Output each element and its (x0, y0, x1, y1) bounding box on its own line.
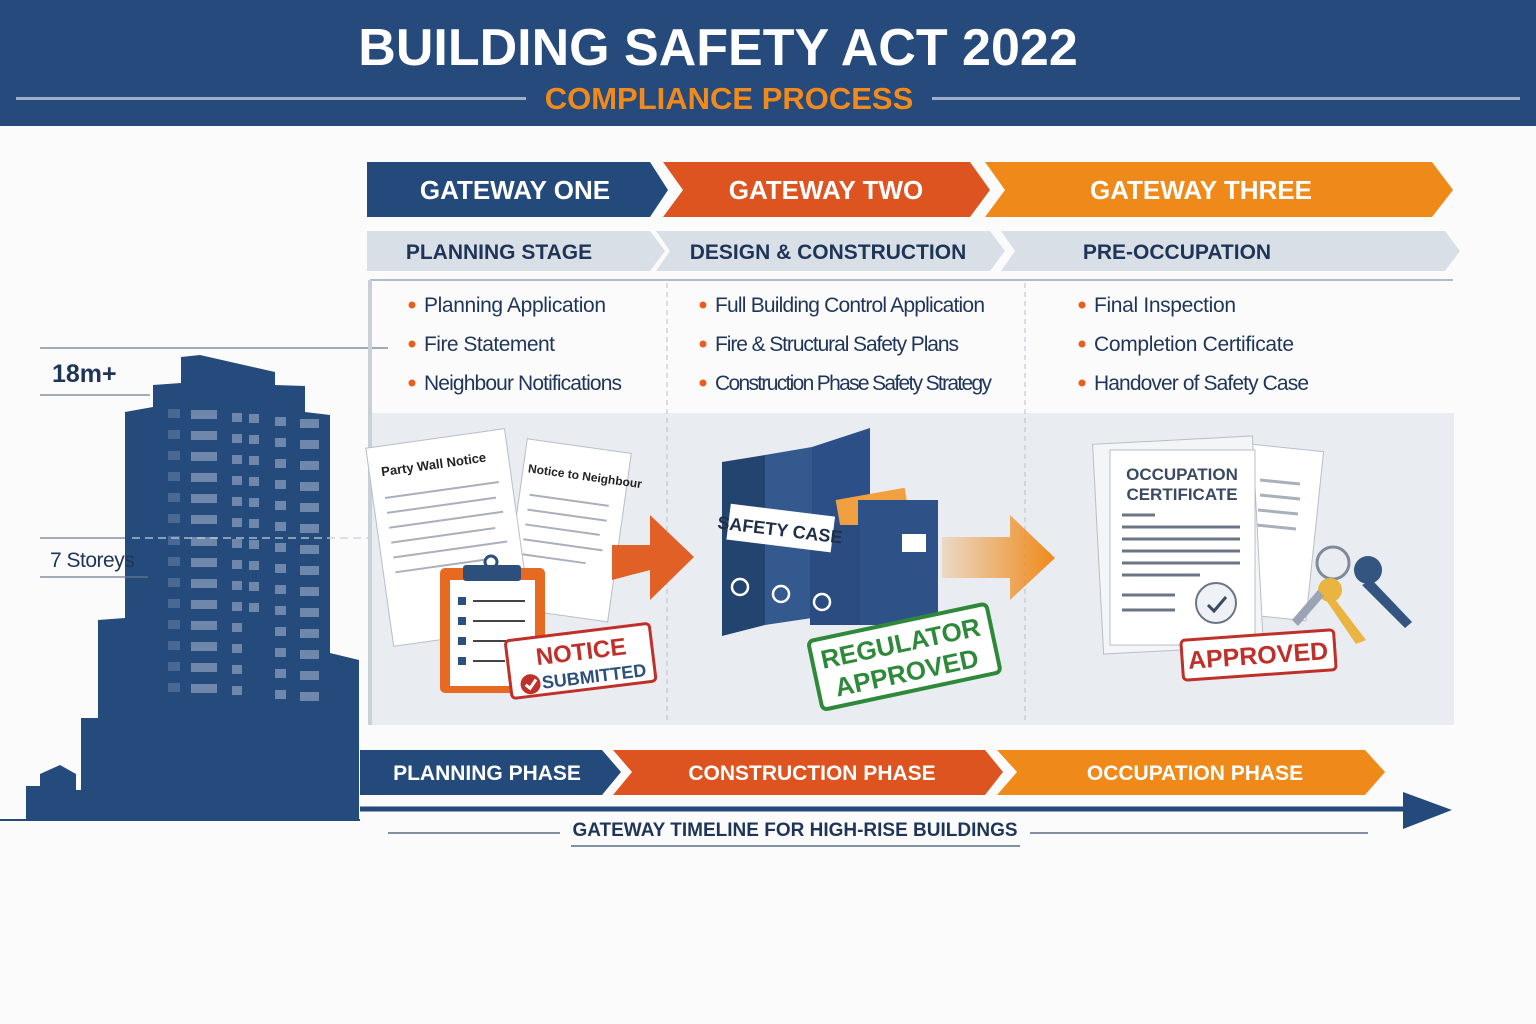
illustration: planning documents (366, 429, 656, 699)
subtitle: COMPLIANCE PROCESS (545, 81, 913, 116)
phase bar: OCCUPATION PHASE (1087, 762, 1303, 785)
bullet lists: Neighbour Notifications (424, 372, 622, 395)
phase bar: PLANNING PHASE (393, 762, 581, 785)
arrow: gateway one to two (612, 515, 694, 600)
stage labels: PLANNING STAGE (406, 241, 592, 264)
gateway arrows: GATEWAY TWO (729, 175, 923, 205)
illustration: planning documents: SUBMITTED (541, 660, 647, 693)
illustration: planning documents: Notice to Neighbour (527, 461, 643, 491)
bullet lists: Handover of Safety Case (1094, 372, 1309, 395)
illustration: planning documents: NOTICE (534, 633, 628, 671)
building silhouette (0, 355, 360, 820)
bullet lists: Completion Certificate (1094, 333, 1294, 356)
bullet lists: Fire Statement (424, 333, 555, 356)
illustration: safety case binders (716, 428, 1001, 710)
arrow: gateway two to three (942, 515, 1055, 600)
phase bar: CONSTRUCTION PHASE (688, 762, 936, 785)
height markers: 18m+ (52, 360, 117, 388)
height markers (40, 348, 388, 577)
bullet lists: Fire & Structural Safety Plans (715, 333, 959, 356)
subtitle (16, 81, 1520, 116)
illustration: occupation certificate and keys: OCCUPATION (1126, 465, 1238, 484)
illustration: safety case binders: SAFETY CASE (716, 512, 844, 548)
title: BUILDING SAFETY ACT 2022 (358, 19, 1078, 77)
illustration: safety case binders: REGULATOR (818, 612, 983, 675)
stage labels: PRE-OCCUPATION (1083, 241, 1271, 264)
illustration: safety case binders: APPROVED (832, 643, 981, 702)
height markers: 7 Storeys (50, 549, 134, 572)
illustration: planning documents: Party Wall Notice (380, 450, 487, 479)
bullet lists: Planning Application (424, 294, 606, 317)
timeline caption: GATEWAY TIMELINE FOR HIGH-RISE BUILDINGS (572, 820, 1018, 841)
stage labels (367, 231, 1460, 271)
bullet lists: Construction Phase Safety Strategy (715, 372, 992, 395)
gateway arrows: GATEWAY THREE (1090, 175, 1312, 205)
header band (0, 0, 1536, 126)
illustration: occupation certificate and keys: CERTIFICATE (1126, 485, 1238, 504)
bullet lists (408, 294, 1309, 395)
illustration: occupation certificate and keys: APPROVED (1187, 637, 1329, 675)
phase bar (360, 750, 1385, 795)
gateway arrows (367, 162, 1453, 217)
timeline arrow (360, 792, 1452, 829)
illustration panel background (368, 413, 1454, 725)
stage labels: DESIGN & CONSTRUCTION (690, 241, 966, 264)
bullet lists: Full Building Control Application (715, 294, 985, 317)
bullet lists: Final Inspection (1094, 294, 1236, 317)
illustration: occupation certificate and keys (1093, 436, 1412, 680)
gateway arrows: GATEWAY ONE (420, 175, 610, 205)
